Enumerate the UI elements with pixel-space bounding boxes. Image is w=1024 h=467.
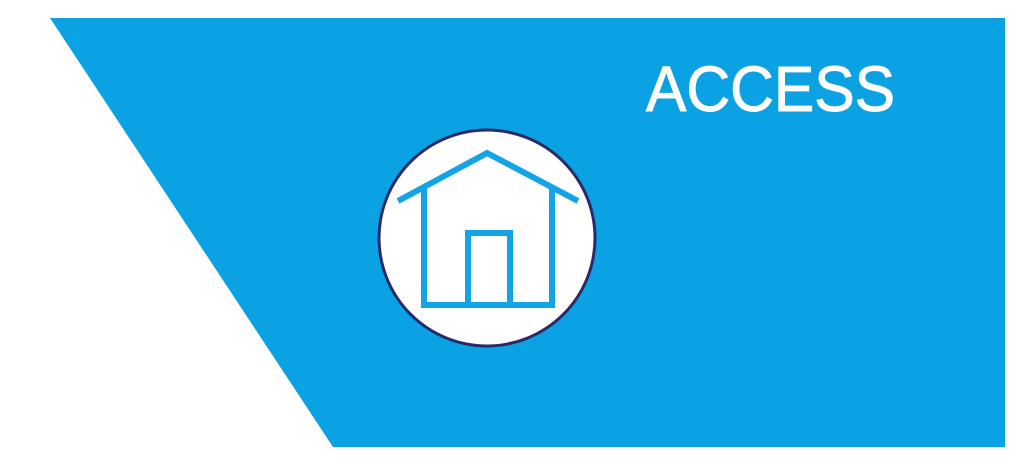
icon: house in circle [379,130,595,346]
title: ACCESS: ACCESS [646,53,895,125]
